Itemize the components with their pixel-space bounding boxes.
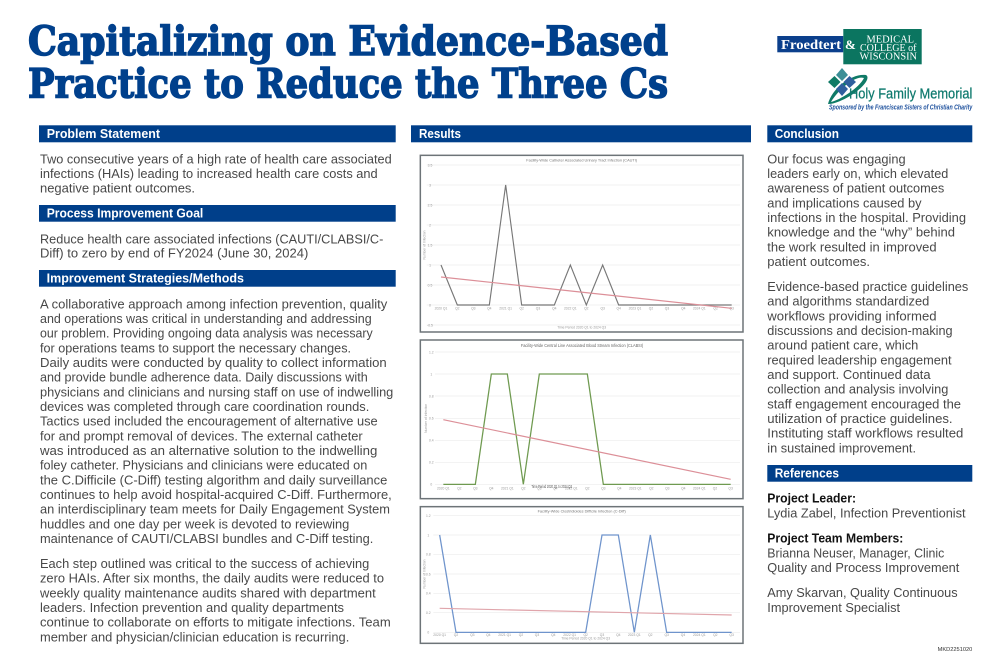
chart: C-Diff: 0.4 [426,592,431,596]
text block: methods paragraph one: foley catheter. Physicians and clinicians were educated on [40,459,367,473]
text block: references: Lydia Zabel, Infection Preventionist [767,506,966,520]
chart: C-Diff: Q2 [583,633,588,637]
chart: CLABSI: Q4 [617,487,622,491]
chart: CAUTI: Q2 [455,306,460,310]
title: Capitalizing on Evidence-Based [28,18,668,65]
text block: methods paragraph one: Tactics used included the encouragement of alternative use [40,415,378,429]
heading: Results [411,125,751,142]
text block: methods paragraph one: huddles and one day per week is devoted to reviewing [40,517,349,531]
chart: CLABSI: Q2 [521,487,526,491]
chart: CAUTI: 1.5 [428,243,432,247]
icon: cross and swoosh [828,68,868,104]
chart: CAUTI: 3 [429,183,431,187]
chart: CLABSI [420,340,743,499]
chart: C-Diff: Q2 [648,633,653,637]
text block: conclusion paragraph two: Instituting staff workflows resulted [767,427,963,441]
chart: CAUTI: Q2 [713,306,718,310]
heading: Conclusion [767,125,972,142]
chart: C-Diff: 2020 Q1 [433,633,446,637]
logo: Holy Family Memorial [828,68,973,111]
chart: CLABSI: Q2 [457,487,462,491]
text block: methods paragraph one: A collaborative approach among infection prevention, quality [40,297,388,311]
text block: methods paragraph one: Daily audits were conducted by quality to collect information [40,356,387,370]
chart: C-Diff: Q2 [454,633,458,637]
heading: Conclusion: Conclusion [775,127,839,141]
chart: CLABSI: 0.4 [429,439,434,443]
chart: CAUTI: Facility-Wide Catheter Associated Urinary Tract Infection (CAUTI) [526,159,638,163]
text block: conclusion paragraph two: workflows providing informed [766,309,937,323]
chart: CAUTI: 2.5 [428,203,432,207]
chart: CLABSI: Q2 [649,487,654,491]
chart: CLABSI: Q3 [601,487,606,491]
heading: Problem Statement: Problem Statement [47,127,161,141]
chart: CLABSI: 0.8 [429,394,434,398]
logo: Froedtert and Medical College of Wisconsin: WISCONSIN [860,50,917,62]
text block: methods paragraph one: and provide bundle adherence data. Daily discussions with [40,371,368,385]
chart: CAUTI: -0.5 [427,323,433,327]
text block: conclusion paragraph two: and algorithms standardized [767,295,929,309]
chart: CLABSI: 0.6 [429,417,434,421]
heading: References [767,465,972,482]
chart: CAUTI: 2024 Q1 [693,306,706,310]
chart: CAUTI: Q3 [471,306,476,310]
text block: references: Project Leader: [767,492,856,506]
text block: references [767,492,966,615]
chart: C-Diff: 0.6 [426,572,431,576]
chart: CLABSI: Q3 [665,487,670,491]
chart: CAUTI: Q2 [584,306,589,310]
chart: C-Diff: 1.2 [426,514,431,518]
chart: C-Diff: Q4 [551,633,556,637]
chart: CAUTI: Q3 [729,306,734,310]
chart: CAUTI: 3.5 [428,163,432,167]
heading: References: References [775,466,839,480]
chart: CLABSI: 2020 Q1 [437,487,450,491]
heading: Problem Statement [39,125,396,142]
chart: CLABSI: Q3 [473,487,478,491]
text block: references: Project Team Members: [767,532,903,546]
chart: CLABSI: Facility-Wide Central Line Associated Blood Stream Infection (CLABSI) [521,343,644,348]
chart: CAUTI: 1 [429,263,431,267]
chart: CAUTI: Time Period 2020 Q1 to 2024 Q3 [557,325,606,329]
chart: C-Diff: Time Period 2020 Q1 to 2024 Q3 [561,637,610,641]
text block: methods paragraph one: devices was completed through care coordination rounds. [40,400,369,414]
chart: C-Diff [420,507,743,643]
chart: CAUTI [420,155,743,332]
chart: CLABSI: Q3 [537,487,542,491]
chart: CLABSI: 0.2 [429,461,434,465]
chart: CLABSI: 1 [430,372,432,376]
logo: Froedtert and Medical College of Wisconsin: & [845,37,856,52]
chart: C-Diff: Q2 [713,633,718,637]
chart: CAUTI: 0 [429,303,431,307]
text block: methods paragraph one: maintenance of CAUTI/CLABSI bundles and C-Diff testing. [40,532,373,546]
chart: CLABSI: Q4 [553,487,558,491]
text block: conclusion paragraph two: discussions and decision-making [767,324,953,338]
chart: CLABSI: 2024 Q1 [693,487,706,491]
text block: methods paragraph one: physicians and clinicians and nursing staff on use of indwelling [40,385,393,399]
logo: Froedtert and Medical College of Wisconsin: MEDICAL [866,34,914,46]
text block: methods paragraph two: Each step outlined was critical to the success of achieving [40,557,369,571]
chart: CAUTI: 0.5 [428,283,432,287]
chart: CAUTI: Q4 [487,306,492,310]
chart: C-Diff: Q3 [470,633,475,637]
text block: methods paragraph two: member and physician/clinician education is recurring. [40,630,349,644]
logo: Froedtert and Medical College of Wisconsin: COLLEGE of [860,43,917,54]
chart: C-Diff: Q4 [486,633,491,637]
chart: CAUTI: Number of Infection [423,230,427,260]
text block: goal [40,232,383,261]
text block: conclusion paragraph two: in sustained improvement. [767,441,916,455]
text block: problem statement: negative patient outcomes. [40,182,195,196]
chart: CAUTI: 2023 Q1 [629,306,642,310]
text block: goal: Diff) to zero by end of FY2024 (June 30, 2024) [40,247,308,261]
text block: methods paragraph one: our problem. Providing ongoing data analysis was necessary [40,327,373,341]
chart: C-Diff: 2021 Q1 [498,633,511,637]
chart: C-Diff: 0.2 [426,611,431,615]
heading: Process Improvement Goal: Process Improvement Goal [47,207,203,221]
text block: methods paragraph one: continues to help avoid hospital-acquired C-Diff. Furthermore, [40,488,392,502]
chart: CAUTI: Q2 [649,306,653,310]
text block: conclusion paragraph one: awareness of patient outcomes [767,182,944,196]
chart: CAUTI: 2020 Q1 [435,306,448,310]
text block: references: Improvement Specialist [767,601,901,615]
text block: methods paragraph two: leaders. Infection prevention and quality departments [40,601,344,615]
chart: C-Diff: 0.8 [426,553,431,557]
text block: methods paragraph two: weekly quality maintenance audits shared with department [39,586,376,600]
text block: references: Brianna Neuser, Manager, Clinic [767,546,944,560]
chart: CLABSI: 2022 Q1 [565,487,578,491]
chart: C-Diff: 1 [427,533,429,537]
title [28,18,668,107]
chart: CAUTI: Q4 [616,306,621,310]
job code: MKD2251020 [938,647,973,653]
chart: CLABSI: Time Period 2020 Q1 to 2024 Q3 [531,484,572,489]
text block: conclusion paragraph one: and implications caused by [767,196,922,210]
heading: Process Improvement Goal [39,205,396,222]
text block: methods paragraph one: and operations was critical in understanding and addressing [40,312,372,326]
text block: conclusion paragraph one [767,152,966,269]
text block: methods paragraph two [39,557,391,644]
text block: methods paragraph two: continue to collaborate on efforts to mitigate infections. Team [40,616,391,630]
text block: conclusion paragraph two: required leadership engagement [767,353,952,367]
chart: CLABSI: Q4 [489,487,494,491]
text block: methods paragraph one [39,297,393,546]
chart: CLABSI: Q3 [728,487,733,491]
chart: C-Diff: 2023 Q1 [628,633,641,637]
text block: methods paragraph two: zero HAIs. After six months, the daily audits were reduced to [40,572,384,586]
text block: conclusion paragraph two: and support. Continued data [767,368,931,382]
text block: methods paragraph one: for and prompt removal of devices. The external catheter [40,429,363,443]
chart: C-Diff: Q4 [616,633,621,637]
chart: CLABSI: Q4 [681,487,686,491]
text block: conclusion paragraph one: leaders early on, which elevated [767,167,948,181]
chart: CAUTI: Q2 [519,306,524,310]
text block: conclusion paragraph two [766,280,968,455]
text block: methods paragraph one: the C.Difficile (C-Diff) testing algorithm and daily surveillance [40,473,387,487]
chart: C-Diff: Number of Infection [423,559,427,589]
chart: C-Diff: 0 [427,631,429,635]
heading: Improvement Strategies/Methods [39,270,396,287]
chart: C-Diff: Q3 [664,633,669,637]
title: Practice to Reduce the Three Cs [28,60,668,107]
chart: CLABSI: 1.2 [429,350,434,354]
text block: references: Amy Skarvan, Quality Continuous [767,586,958,600]
text block: problem statement [40,152,392,196]
chart: C-Diff: Q3 [729,633,734,637]
chart: CAUTI: 2 [429,223,431,227]
chart: CLABSI: 2023 Q1 [629,487,642,491]
chart: C-Diff: Q4 [681,633,685,637]
chart: CAUTI: Q3 [600,306,605,310]
text block: methods paragraph one: was introduced as an alternative solution to the indwelling [39,444,377,458]
text block: problem statement: Two consecutive years of a high rate of health care associated [40,152,392,166]
logo: Holy Family Memorial: Holy Family Memorial [849,85,972,102]
logo: Froedtert and Medical College of Wisconsin: Froedtert [781,38,841,53]
text block: conclusion paragraph two: Evidence-based practice guidelines [767,280,968,294]
text block: problem statement: infections (HAIs) leading to increased health care costs and [40,167,378,181]
text block: conclusion paragraph one: knowledge and the “why” behind [767,226,955,240]
text block: conclusion paragraph two: collection and analysis involving [767,383,948,397]
text block: methods paragraph one: an interdisciplinary team meets for Daily Engagement System [40,503,390,517]
chart: CAUTI: 2021 Q1 [499,306,512,310]
chart: CAUTI: Q4 [681,306,686,310]
chart: C-Diff: Q3 [535,633,539,637]
chart: CAUTI: Q4 [552,306,557,310]
heading: Improvement Strategies/Methods: Improvement Strategies/Methods [47,271,244,285]
chart: CAUTI: Q3 [536,306,540,310]
text block: conclusion paragraph one: Our focus was engaging [767,152,906,166]
text block: conclusion paragraph one: patient outcomes. [767,255,870,269]
chart: C-Diff: Q2 [519,633,523,637]
text block: goal: Reduce health care associated infections (CAUTI/CLABSI/C- [40,232,383,246]
chart: CLABSI: Q2 [713,487,717,491]
chart: CLABSI: 0 [430,483,432,487]
text block: conclusion paragraph two: utilization of practice guidelines. [767,412,953,426]
chart: C-Diff: Q3 [600,633,604,637]
text block: conclusion paragraph two: around patient care, which [767,339,918,353]
text block: conclusion paragraph two: staff engagement encouraged the [767,397,961,411]
chart: CLABSI: Q2 [585,487,590,491]
chart: CAUTI: 2022 Q1 [564,306,577,310]
text block: conclusion paragraph one: infections in the hospital. Providing [767,211,966,225]
chart: CLABSI: Number of Infection [424,404,428,433]
text block: references: Quality and Process Improvement [767,561,960,575]
chart: C-Diff: 2022 Q1 [563,633,576,637]
chart: CLABSI: 2021 Q1 [501,487,514,491]
chart: C-Diff: Facility-Wide Clostridioides Difficile Infection (C-Diff) [538,509,626,513]
text block: conclusion paragraph one: the work resulted in improved [767,240,937,254]
logo: Froedtert and Medical College of Wisconsin [777,29,922,64]
chart: C-Diff: 2024 Q1 [693,633,706,637]
text block: methods paragraph one: for operations teams to support the necessary changes. [40,341,351,355]
heading: Results: Results [419,127,461,141]
chart: CAUTI: Q3 [665,306,669,310]
